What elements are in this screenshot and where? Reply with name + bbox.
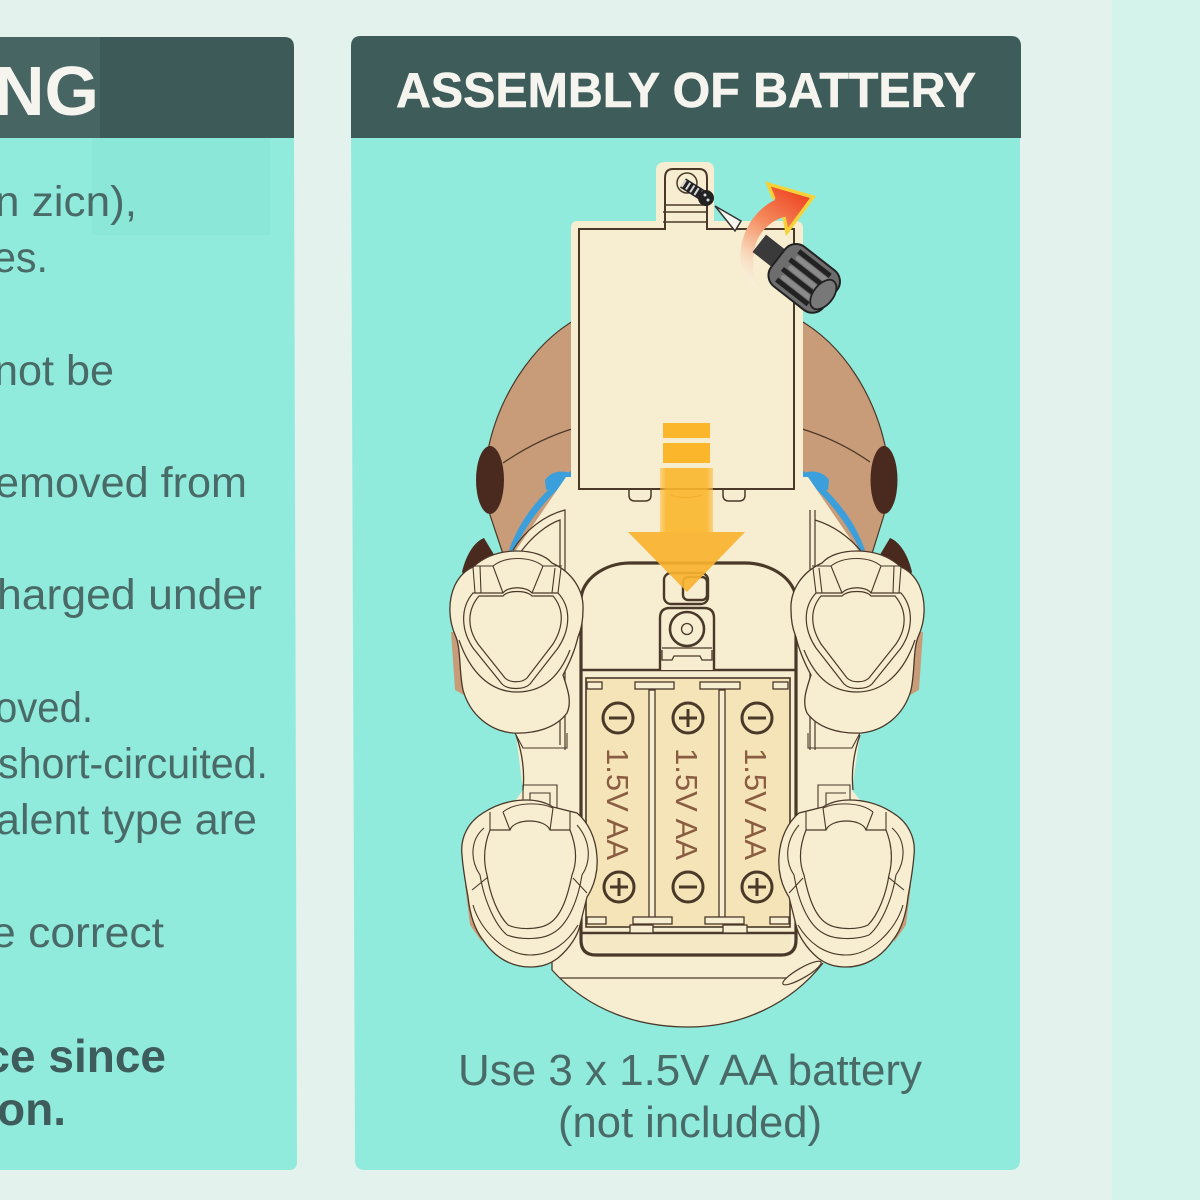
panel: assembly of battery [351, 36, 1021, 1170]
battery labels: 1.5V AA [669, 748, 704, 860]
heading: assembly of battery: ASSEMBLY OF BATTERY [396, 64, 976, 118]
battery labels [600, 748, 773, 860]
insertion arrow [628, 423, 745, 592]
caption: Use 3 x 1.5V AA battery [458, 1047, 922, 1095]
caption [458, 1047, 922, 1147]
warning text block: emoved from [0, 459, 247, 507]
screw [677, 173, 714, 206]
illustration: robot underside [450, 162, 924, 1027]
battery cover [571, 162, 803, 501]
caption: (not included) [558, 1099, 822, 1147]
robot brown shell [451, 318, 923, 942]
screwdriver handle [744, 224, 847, 320]
battery labels: 1.5V AA [600, 748, 635, 860]
removal arrow [740, 184, 813, 288]
dark side wheels [462, 446, 912, 585]
cream body [470, 477, 905, 1027]
battery labels: 1.5V AA [738, 748, 773, 860]
panel: warning (left, cropped) [0, 37, 297, 1170]
warning text block: short-circuited. [0, 740, 268, 788]
warning text block: alent type are [0, 796, 257, 844]
blue stripes [509, 470, 865, 552]
screwdriver tip [715, 206, 741, 231]
warning text block [0, 178, 268, 1135]
battery compartment [581, 563, 796, 955]
screw post [660, 573, 714, 670]
warning text block: harged under [0, 571, 262, 619]
polarity symbols [603, 703, 772, 902]
front feet [450, 551, 924, 733]
rear feet [462, 800, 914, 967]
battery dividers [587, 682, 789, 933]
